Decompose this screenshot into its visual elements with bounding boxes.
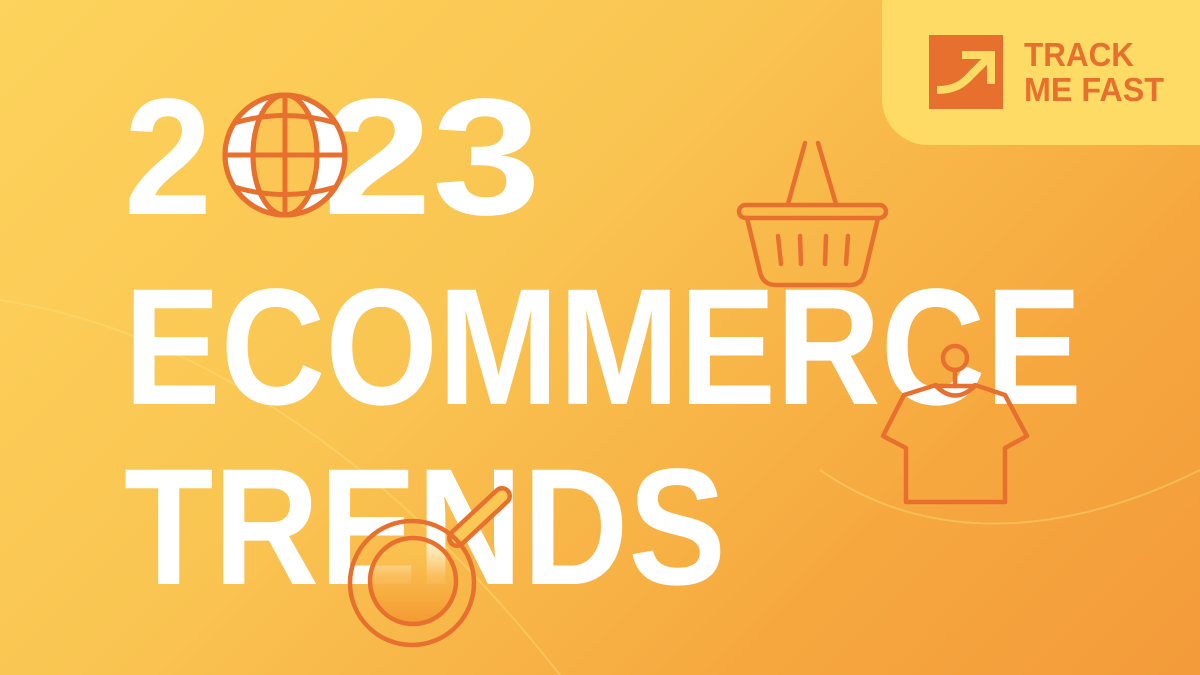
icon: magnifier <box>350 496 502 645</box>
icon: globe <box>225 95 345 215</box>
title: 2 <box>124 65 212 250</box>
title: TRENDS <box>124 435 726 620</box>
title: ECOMMERCE <box>124 255 1082 440</box>
logo icon <box>929 35 1003 109</box>
logo text: TRACK <box>1024 36 1134 73</box>
icon: shirt on hanger <box>883 346 1027 502</box>
logo badge <box>882 0 1200 145</box>
icon: basket <box>739 143 886 285</box>
title <box>124 65 1082 620</box>
title: 23 <box>323 65 541 250</box>
logo text line 2: ME FAST <box>1024 71 1164 108</box>
